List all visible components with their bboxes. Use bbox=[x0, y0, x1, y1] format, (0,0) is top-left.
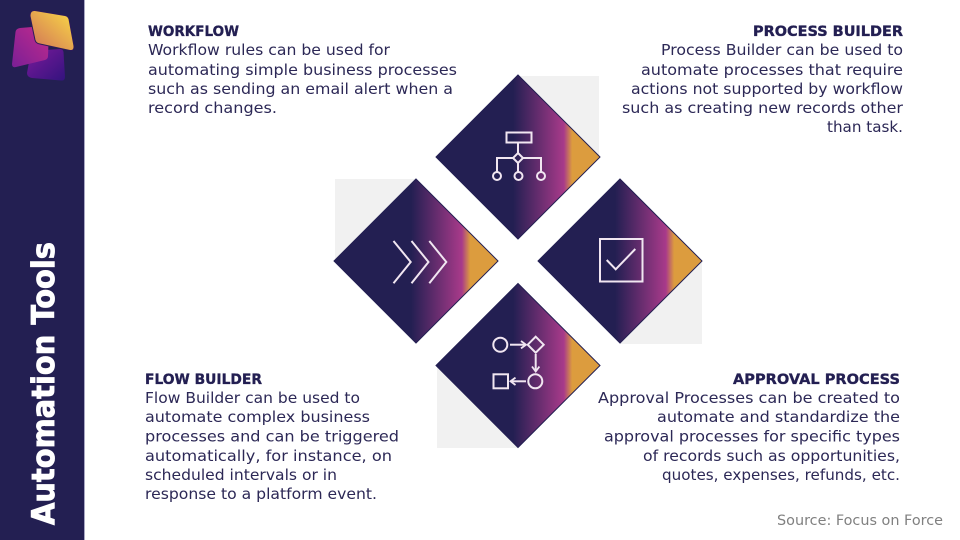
text block: process builder: automate processes that require bbox=[641, 61, 903, 79]
text block: workflow: record changes. bbox=[148, 99, 277, 117]
icon: checkbox bbox=[600, 239, 642, 282]
source note: Source: Focus on Force bbox=[777, 513, 943, 529]
icon: process flow bbox=[493, 337, 544, 388]
text block: approval process bbox=[598, 372, 900, 484]
diamond: flow builder chevrons bbox=[334, 179, 498, 343]
panel: grey backing squares bbox=[335, 76, 702, 448]
text block: approval process: approval processes for specific types bbox=[604, 428, 900, 446]
text block: approval process: Approval Processes can be created to bbox=[598, 389, 900, 407]
text block: flow builder: automate complex business bbox=[145, 408, 370, 426]
text block: workflow bbox=[148, 24, 457, 117]
icon: workflow hierarchy bbox=[493, 132, 545, 180]
text block: flow builder: automatically, for instance, on bbox=[145, 447, 392, 465]
text block: workflow: WORKFLOW bbox=[148, 24, 239, 40]
text block: workflow: automating simple business processes bbox=[148, 61, 457, 79]
text block: process builder: such as creating new records other bbox=[622, 99, 904, 117]
text block: process builder: Process Builder can be used to bbox=[661, 41, 903, 59]
diamond: workflow bbox=[436, 75, 600, 239]
text block: process builder bbox=[622, 24, 904, 136]
text block: approval process: APPROVAL PROCESS bbox=[733, 372, 900, 388]
diamond: approval process bbox=[436, 284, 600, 448]
text block: flow builder: response to a platform event. bbox=[145, 485, 377, 503]
sidebar title: Automation Tools bbox=[26, 242, 62, 525]
sidebar bbox=[0, 0, 85, 540]
text block: flow builder bbox=[145, 372, 399, 503]
text block: workflow: Workflow rules can be used for bbox=[148, 41, 391, 59]
text block: approval process: automate and standardize the bbox=[657, 408, 900, 426]
text block: flow builder: Flow Builder can be used to bbox=[145, 389, 360, 407]
text block: process builder: actions not supported by workflow bbox=[631, 80, 903, 98]
text block: process builder: than task. bbox=[827, 118, 903, 136]
diamond: process builder checkbox bbox=[538, 179, 702, 343]
text block: flow builder: processes and can be triggered bbox=[145, 428, 399, 446]
text block: process builder: PROCESS BUILDER bbox=[753, 24, 903, 40]
text block: approval process: of records such as opportunities, bbox=[643, 447, 900, 465]
icon: logo bbox=[12, 10, 74, 81]
text block: flow builder: FLOW BUILDER bbox=[145, 372, 262, 388]
icon: triple chevrons bbox=[394, 241, 446, 283]
text block: workflow: such as sending an email alert when a bbox=[148, 80, 453, 98]
text block: approval process: quotes, expenses, refunds, etc. bbox=[662, 466, 900, 484]
text block: flow builder: scheduled intervals or in bbox=[145, 466, 337, 484]
